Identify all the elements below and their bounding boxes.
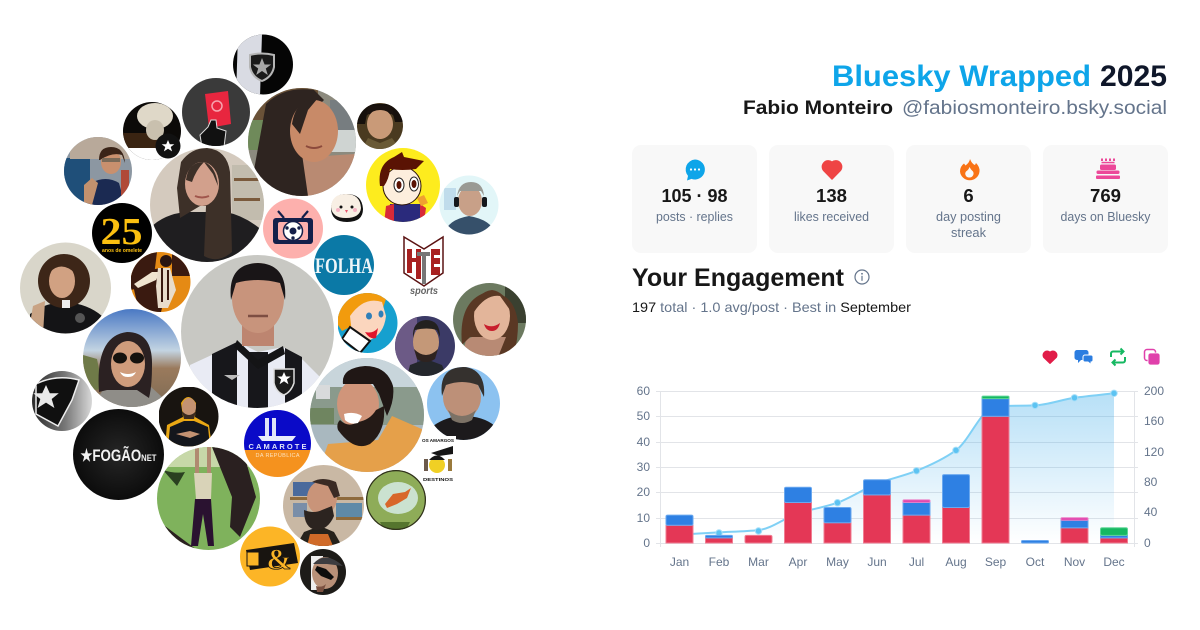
avatar: woman with sunglasses [83, 309, 181, 408]
month labels: Feb [709, 555, 730, 569]
avatar: red card [182, 78, 250, 147]
avatar: cartoon woman [338, 293, 398, 354]
avatar cluster [20, 34, 527, 595]
avatar: 25 anos logo [92, 203, 152, 263]
avatar: yellow ampersand logo: & [266, 543, 292, 576]
month labels [670, 555, 1125, 569]
avatar: cartoon boy [366, 148, 440, 224]
avatar: bearded man with bookshelf [283, 465, 364, 546]
icon: flame [960, 159, 980, 180]
icon: birthday cake [1096, 158, 1120, 179]
cumulative line [680, 393, 1114, 535]
avatar: man with yellow outline [159, 387, 219, 447]
avatar: woman in black shirt [150, 148, 264, 262]
panel: likes received [769, 145, 894, 253]
panel: days on Bluesky [1043, 145, 1168, 253]
avatar: small woman with fringe [357, 103, 403, 149]
left axis labels: 30 [637, 460, 650, 474]
stacked bars [666, 396, 1128, 543]
avatar: 25 anos logo: anos de omelete [102, 248, 142, 254]
avatar: HTE sports logo [404, 237, 443, 297]
avatar: 25 anos logo: 25 [100, 211, 142, 253]
avatar: pirate emoji badge [420, 436, 456, 482]
month labels: Dec [1103, 555, 1125, 569]
icon: chat bubble [686, 160, 705, 180]
month labels: Mar [748, 555, 769, 569]
avatar: Botafogo flag [233, 34, 293, 96]
avatar: Camarote da República logo: CAMAROTE [248, 442, 306, 451]
panel: posts and replies [632, 145, 757, 253]
chart: monthly engagement [637, 384, 1164, 569]
engagement summary: 197 total · 1.0 avg/post · Best in September [632, 299, 911, 315]
avatar: bearded man with city view [310, 357, 424, 473]
month labels: Oct [1026, 555, 1045, 569]
icon: legend reposts [1111, 348, 1125, 366]
avatar: woman with curly hair in Botafogo shirt [20, 242, 112, 336]
right axis labels: 0 [1144, 536, 1151, 550]
month labels: Sep [985, 555, 1006, 569]
month labels: Apr [789, 555, 807, 569]
avatar: fox artwork [366, 470, 426, 530]
stat value: 138 [816, 185, 847, 206]
avatar: Folha logo [314, 235, 374, 295]
left axis labels: 10 [637, 511, 650, 525]
profile name: Fabio Monteiro [743, 98, 893, 119]
stat label: likes received [794, 210, 869, 224]
month labels: Jul [909, 555, 924, 569]
stat label second line: streak [951, 226, 987, 240]
title: Bluesky Wrapped 2025: 2025 [1100, 60, 1167, 93]
month labels: Nov [1064, 555, 1085, 569]
avatar: woman with glasses [64, 137, 132, 205]
chart grid and axes [656, 391, 1138, 547]
left axis labels: 50 [637, 409, 650, 423]
stat value: 105 · 98 [662, 185, 728, 206]
avatar: pink TV [263, 198, 323, 259]
right axis labels: 80 [1144, 475, 1158, 489]
avatar: Fogão.net logo [73, 409, 164, 500]
left axis labels: 40 [637, 435, 650, 449]
avatar: Camarote da República logo [244, 410, 312, 478]
cumulative points [716, 390, 1117, 536]
left axis labels: 0 [643, 536, 650, 550]
icon: legend likes [1043, 351, 1057, 364]
left axis labels: 60 [637, 384, 650, 398]
stat label: day posting [936, 210, 1001, 224]
avatar: yellow ampersand logo [240, 526, 300, 587]
avatar: older man against blue sky [427, 367, 500, 440]
avatar: football player painting [131, 252, 191, 312]
stat value: 769 [1090, 185, 1121, 206]
right axis labels: 160 [1144, 414, 1164, 428]
avatar: alpaca [123, 102, 181, 163]
icon: legend quotes [1144, 350, 1160, 365]
avatar: bao bun [331, 194, 363, 222]
stat label: posts · replies [656, 210, 733, 224]
right axis labels: 40 [1144, 505, 1158, 519]
left axis labels: 20 [637, 485, 650, 499]
month labels: Jan [670, 555, 689, 569]
avatar: HTE sports logo: sports [410, 285, 438, 297]
title: Bluesky Wrapped 2025: Bluesky Wrapped [832, 60, 1091, 93]
profile handle: @fabiosmonteiro.bsky.social [902, 98, 1167, 119]
right axis labels [1144, 384, 1164, 550]
avatar: man in purple room [395, 316, 455, 377]
avatar: Camarote da República logo: DA REPÚBLICA [256, 452, 300, 459]
month labels: May [826, 555, 849, 569]
right axis labels: 200 [1144, 384, 1164, 398]
avatar: Fogão.net logo: ★FOGÃONET [80, 445, 157, 465]
icon: legend replies [1074, 350, 1093, 364]
avatar: woman with curly hair [248, 88, 356, 200]
avatar: pirate emoji badge: DESTINOS [423, 477, 453, 482]
month labels: Jun [867, 555, 887, 569]
icon: heart [822, 161, 842, 179]
avatar: person hanging in forest [157, 447, 261, 551]
avatar: commentator with headset [439, 175, 499, 236]
chart legend [1043, 348, 1160, 366]
right axis labels: 120 [1144, 445, 1164, 459]
panel: day posting streak [906, 145, 1031, 253]
avatar: man with dark sunglasses [300, 549, 346, 595]
heading: Your Engagement: Your Engagement [632, 264, 845, 292]
cumulative area [680, 393, 1114, 543]
avatar: woman with red lipstick [453, 283, 527, 357]
stat label: days on Bluesky [1060, 210, 1151, 224]
avatar: pirate emoji badge: OS AMARGOS [422, 438, 454, 443]
left axis labels [637, 384, 650, 550]
avatar: Botafogo star shield [32, 371, 92, 431]
avatar: main profile photo [181, 255, 334, 410]
icon: info [855, 270, 869, 284]
stat value: 6 [963, 185, 974, 206]
avatar: Folha logo: FOLHA [315, 253, 373, 278]
month labels: Aug [945, 555, 967, 569]
